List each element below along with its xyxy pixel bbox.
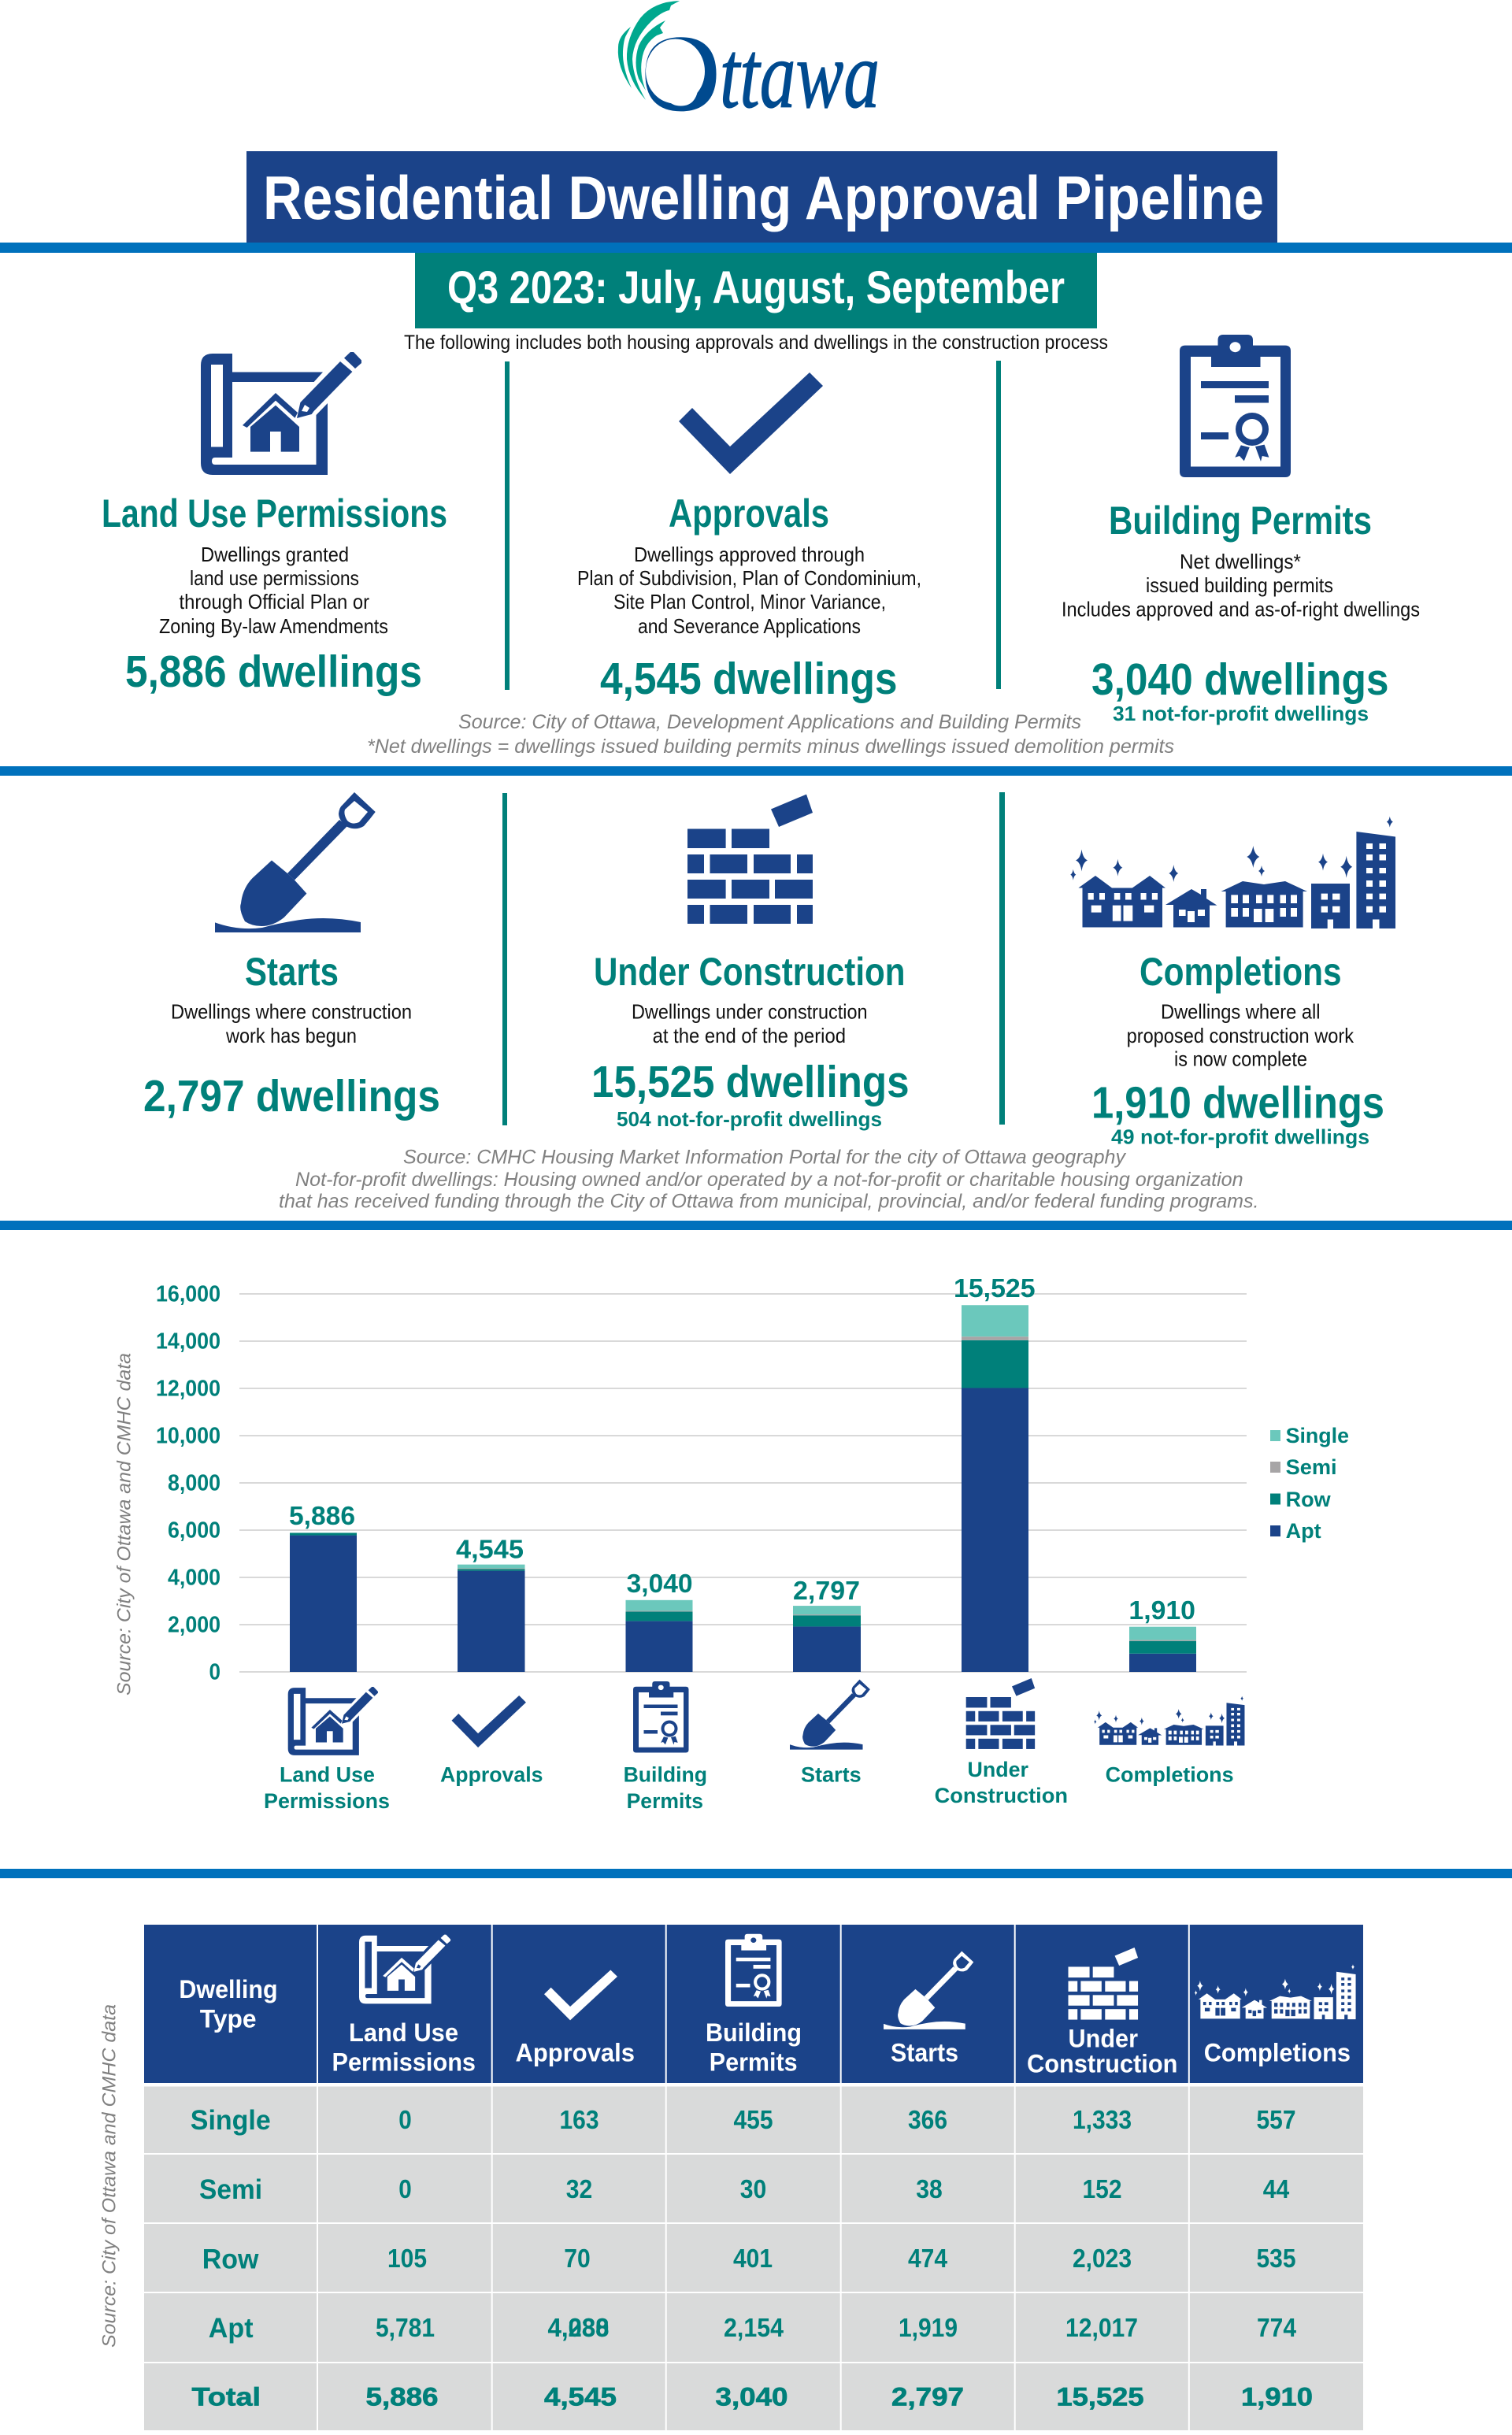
legend: Semi <box>1286 1455 1337 1479</box>
row: Total <box>192 2383 1313 2411</box>
heading: Approvals: Approvals <box>669 491 829 536</box>
icon: neighbourhood of buildings <box>1070 817 1395 928</box>
header: Approvals <box>515 1970 635 2067</box>
row: Row: Row <box>202 2244 259 2274</box>
icon: shovel <box>215 792 376 932</box>
heading: Under Construction: Under Construction <box>594 950 906 994</box>
bar: Under Construction: 15,525 <box>954 1273 1036 1303</box>
description <box>159 543 388 638</box>
header: Completions: Completions <box>1204 2039 1351 2067</box>
header: Starts: Starts <box>891 2039 958 2067</box>
legend: Single <box>1286 1424 1349 1447</box>
description: through Official Plan or <box>180 590 369 613</box>
source note: approvals row: Source: City of Ottawa, Development Applications and Building Permits <box>458 711 1081 733</box>
bar: Approvals <box>456 1534 524 1672</box>
category: Building Permits <box>624 1681 707 1813</box>
row: Row: 474 <box>908 2244 948 2273</box>
source note: approvals row: *Net dwellings = dwellings issued building permits minus dwellings issued demolition permits <box>367 736 1174 758</box>
source note: construction row: Not-for-profit dwellings: Housing owned and/or operated by a not-for-profit or charitable housing organization <box>295 1169 1243 1191</box>
heading: Building Permits: Building Permits <box>1109 498 1372 543</box>
row: Row: 535 <box>1257 2244 1296 2273</box>
row: Total: 5,886 <box>365 2383 438 2411</box>
count: 15,525 dwellings: 15,525 dwellings <box>591 1057 910 1107</box>
row: Row: 401 <box>733 2244 773 2273</box>
row: Apt: 5,781 <box>376 2313 435 2342</box>
y axis labels: 4,000 <box>168 1566 220 1591</box>
header: Building Permits <box>706 1934 802 2076</box>
chart source note: Source: City of Ottawa and CMHC data <box>113 1353 135 1696</box>
header: Approvals: Approvals <box>515 2039 635 2067</box>
category: Land Use Permissions: Land Use <box>280 1762 375 1786</box>
panel: Starts <box>143 792 440 1121</box>
row: Single <box>191 2105 1295 2136</box>
row: Semi: 0 <box>398 2174 412 2203</box>
category: Land Use Permissions: Permissions <box>264 1789 390 1813</box>
table header: Dwelling <box>179 1975 278 2003</box>
row: Single: 455 <box>734 2105 773 2134</box>
row: Apt: 12,017 <box>1065 2313 1138 2342</box>
category: Building Permits: Building <box>624 1762 707 1786</box>
bar: Building Permits: 3,040 <box>627 1569 693 1598</box>
header: Under Construction: Construction <box>1027 2050 1177 2078</box>
category: Under Construction <box>935 1678 1068 1807</box>
count: 1,910 dwellings: 1,910 dwellings <box>1091 1077 1384 1128</box>
count: 5,886 dwellings: 5,886 dwellings <box>125 647 422 697</box>
y axis labels <box>156 1282 220 1685</box>
table header: Type <box>200 2005 257 2033</box>
stacked bar chart <box>113 1273 1349 1813</box>
description: Dwellings under construction <box>632 1000 868 1024</box>
row: Semi: 152 <box>1082 2174 1121 2203</box>
description: Dwellings where construction <box>171 1000 412 1024</box>
y axis labels: 16,000 <box>156 1282 220 1307</box>
category: Starts: Starts <box>801 1762 862 1786</box>
description: is now complete <box>1174 1047 1307 1071</box>
row: Apt: 1,919 <box>899 2313 958 2342</box>
category: Starts <box>790 1680 870 1786</box>
icon: blueprint with house and pencil <box>201 352 361 475</box>
row: Semi <box>199 2174 1290 2205</box>
category: Land Use Permissions <box>264 1687 390 1813</box>
header: Under Construction: Under <box>1068 2024 1138 2052</box>
not-for-profit count: 504 not-for-profit dwellings <box>617 1107 882 1131</box>
panel: Land Use Permissions <box>102 352 447 697</box>
row: Apt: 2,154 <box>724 2313 784 2342</box>
header: Completions <box>1195 1964 1356 2067</box>
header: Starts <box>884 1951 973 2067</box>
bar: Approvals: 4,545 <box>456 1534 524 1564</box>
table source note: Source: City of Ottawa and CMHC data <box>99 2004 120 2348</box>
legend: Apt <box>1286 1519 1321 1543</box>
heading: Completions: Completions <box>1140 950 1342 994</box>
header: Land Use Permissions: Permissions <box>332 2048 476 2076</box>
description: Includes approved and as-of-right dwellings <box>1062 597 1420 621</box>
description: and Severance Applications <box>638 614 861 638</box>
bar: Starts: 2,797 <box>793 1576 860 1605</box>
description <box>1127 1000 1354 1071</box>
source note: construction row: Source: CMHC Housing Market Information Portal for the city of Ottawa geography <box>403 1147 1126 1169</box>
section rules <box>0 243 1512 1878</box>
source note: construction row <box>279 1147 1259 1213</box>
description: proposed construction work <box>1127 1024 1354 1047</box>
description: land use permissions <box>190 566 359 590</box>
bar: Land Use Permissions <box>289 1501 357 1672</box>
row: Total: 2,797 <box>891 2383 964 2411</box>
subtitle banner: quarter: Q3 2023: July, August, September <box>447 262 1065 313</box>
panel: Under Construction <box>591 795 910 1131</box>
source note: approvals row <box>367 711 1174 758</box>
header: Land Use Permissions: Land Use <box>349 2018 458 2047</box>
description <box>1062 550 1420 621</box>
panel: Building Permits <box>1062 335 1420 725</box>
logo: City of Ottawa: O <box>640 13 721 135</box>
heading: Land Use Permissions: Land Use Permissions <box>102 491 447 536</box>
row: Single: 1,333 <box>1073 2105 1132 2134</box>
header: Under Construction <box>1027 1948 1177 2078</box>
category: Under Construction: Construction <box>935 1784 1068 1807</box>
y axis labels: 14,000 <box>156 1329 220 1355</box>
row: Single: 163 <box>559 2105 598 2134</box>
row: Row: 70 <box>564 2244 591 2273</box>
title banner <box>246 151 1277 243</box>
row: Semi: 30 <box>740 2174 766 2203</box>
category: Completions <box>1094 1696 1244 1786</box>
description <box>171 1000 412 1047</box>
legend: Row <box>1286 1488 1332 1511</box>
description: Dwellings granted <box>201 543 349 566</box>
panel: Completions <box>1070 817 1395 1148</box>
icon: brick wall <box>687 795 813 924</box>
row: Total: 15,525 <box>1057 2383 1143 2411</box>
header: Building Permits: Building <box>706 2018 802 2047</box>
description <box>632 1000 868 1047</box>
y axis labels: 10,000 <box>156 1424 220 1449</box>
count: 4,545 dwellings: 4,545 dwellings <box>600 654 898 704</box>
category: Approvals <box>440 1696 543 1786</box>
y axis labels: 12,000 <box>156 1377 220 1402</box>
bar: Starts <box>793 1576 861 1672</box>
y axis labels: 6,000 <box>168 1518 220 1544</box>
row: Apt: 774 <box>1257 2313 1297 2342</box>
heading: Starts: Starts <box>245 950 339 994</box>
row: Total: 1,910 <box>1241 2383 1313 2411</box>
not-for-profit count: 31 not-for-profit dwellings <box>1113 702 1369 725</box>
description: at the end of the period <box>653 1024 846 1047</box>
divider <box>999 792 1005 1125</box>
row: Single: 0 <box>398 2105 412 2134</box>
not-for-profit count: 49 not-for-profit dwellings <box>1111 1125 1369 1148</box>
divider <box>502 793 507 1125</box>
row: Semi: 38 <box>916 2174 943 2203</box>
header: Land Use Permissions <box>332 1935 476 2076</box>
divider <box>505 361 510 690</box>
description: Dwellings where all <box>1161 1000 1320 1024</box>
row: Apt: 4,038 <box>548 2313 610 2342</box>
description: Plan of Subdivision, Plan of Condominium, <box>577 566 921 590</box>
icon: check mark <box>679 372 823 474</box>
bar: Building Permits <box>625 1569 693 1672</box>
row: Semi: Semi <box>199 2174 262 2205</box>
divider <box>996 361 1001 689</box>
title banner: Residential Dwelling Approval Pipeline <box>263 163 1264 232</box>
count: 2,797 dwellings: 2,797 dwellings <box>143 1071 440 1121</box>
row: Row: 105 <box>387 2244 427 2273</box>
row: Semi: 44 <box>1263 2174 1290 2203</box>
description <box>577 543 921 638</box>
subtitle banner: quarter <box>415 253 1097 328</box>
logo: City of Ottawa: ttawa <box>720 22 880 128</box>
bar: Under Construction <box>954 1273 1036 1672</box>
row: Total: 3,040 <box>715 2383 788 2411</box>
row: Row: 2,023 <box>1073 2244 1132 2273</box>
row: Row <box>202 2244 1296 2274</box>
y axis labels: 0 <box>209 1660 220 1685</box>
count: 3,040 dwellings: 3,040 dwellings <box>1091 654 1389 705</box>
bar: Completions <box>1128 1596 1196 1672</box>
data table <box>99 1925 1363 2430</box>
category: Under Construction: Under <box>967 1758 1028 1781</box>
row: Single: 366 <box>908 2105 947 2134</box>
description: Net dwellings* <box>1180 550 1301 573</box>
row: Single: 557 <box>1257 2105 1296 2134</box>
row: Single: Single <box>191 2105 271 2136</box>
row: Total: 4,545 <box>544 2383 617 2411</box>
row: Apt: 4,280 <box>548 2313 610 2342</box>
y axis labels: 2,000 <box>168 1613 220 1638</box>
icon: clipboard with seal <box>1180 335 1291 477</box>
category: Completions: Completions <box>1106 1762 1234 1786</box>
row: Total: Total <box>192 2383 261 2411</box>
row: Semi: 32 <box>566 2174 592 2203</box>
row: Apt <box>209 2313 1297 2344</box>
header: Building Permits: Permits <box>710 2048 798 2076</box>
y axis labels: 8,000 <box>168 1471 220 1496</box>
description: Zoning By-law Amendments <box>159 614 388 638</box>
description: Site Plan Control, Minor Variance, <box>613 590 886 613</box>
logo: City of Ottawa <box>618 1 880 135</box>
description: Dwellings approved through <box>634 543 865 566</box>
source note: construction row: that has received funding through the City of Ottawa from municipal, provincial, and/or federal funding programs. <box>279 1191 1259 1213</box>
bar: Completions: 1,910 <box>1128 1596 1195 1625</box>
description: work has begun <box>225 1024 357 1047</box>
intro text: The following includes both housing approvals and dwellings in the construction process <box>404 332 1108 354</box>
panel: Approvals <box>577 372 921 704</box>
row: Apt: Apt <box>209 2313 254 2344</box>
category: Approvals: Approvals <box>440 1762 543 1786</box>
description: issued building permits <box>1146 573 1333 597</box>
bar: Land Use Permissions: 5,886 <box>289 1501 355 1530</box>
legend <box>1270 1424 1349 1543</box>
table header <box>144 1925 1363 2083</box>
category: Building Permits: Permits <box>627 1789 703 1813</box>
